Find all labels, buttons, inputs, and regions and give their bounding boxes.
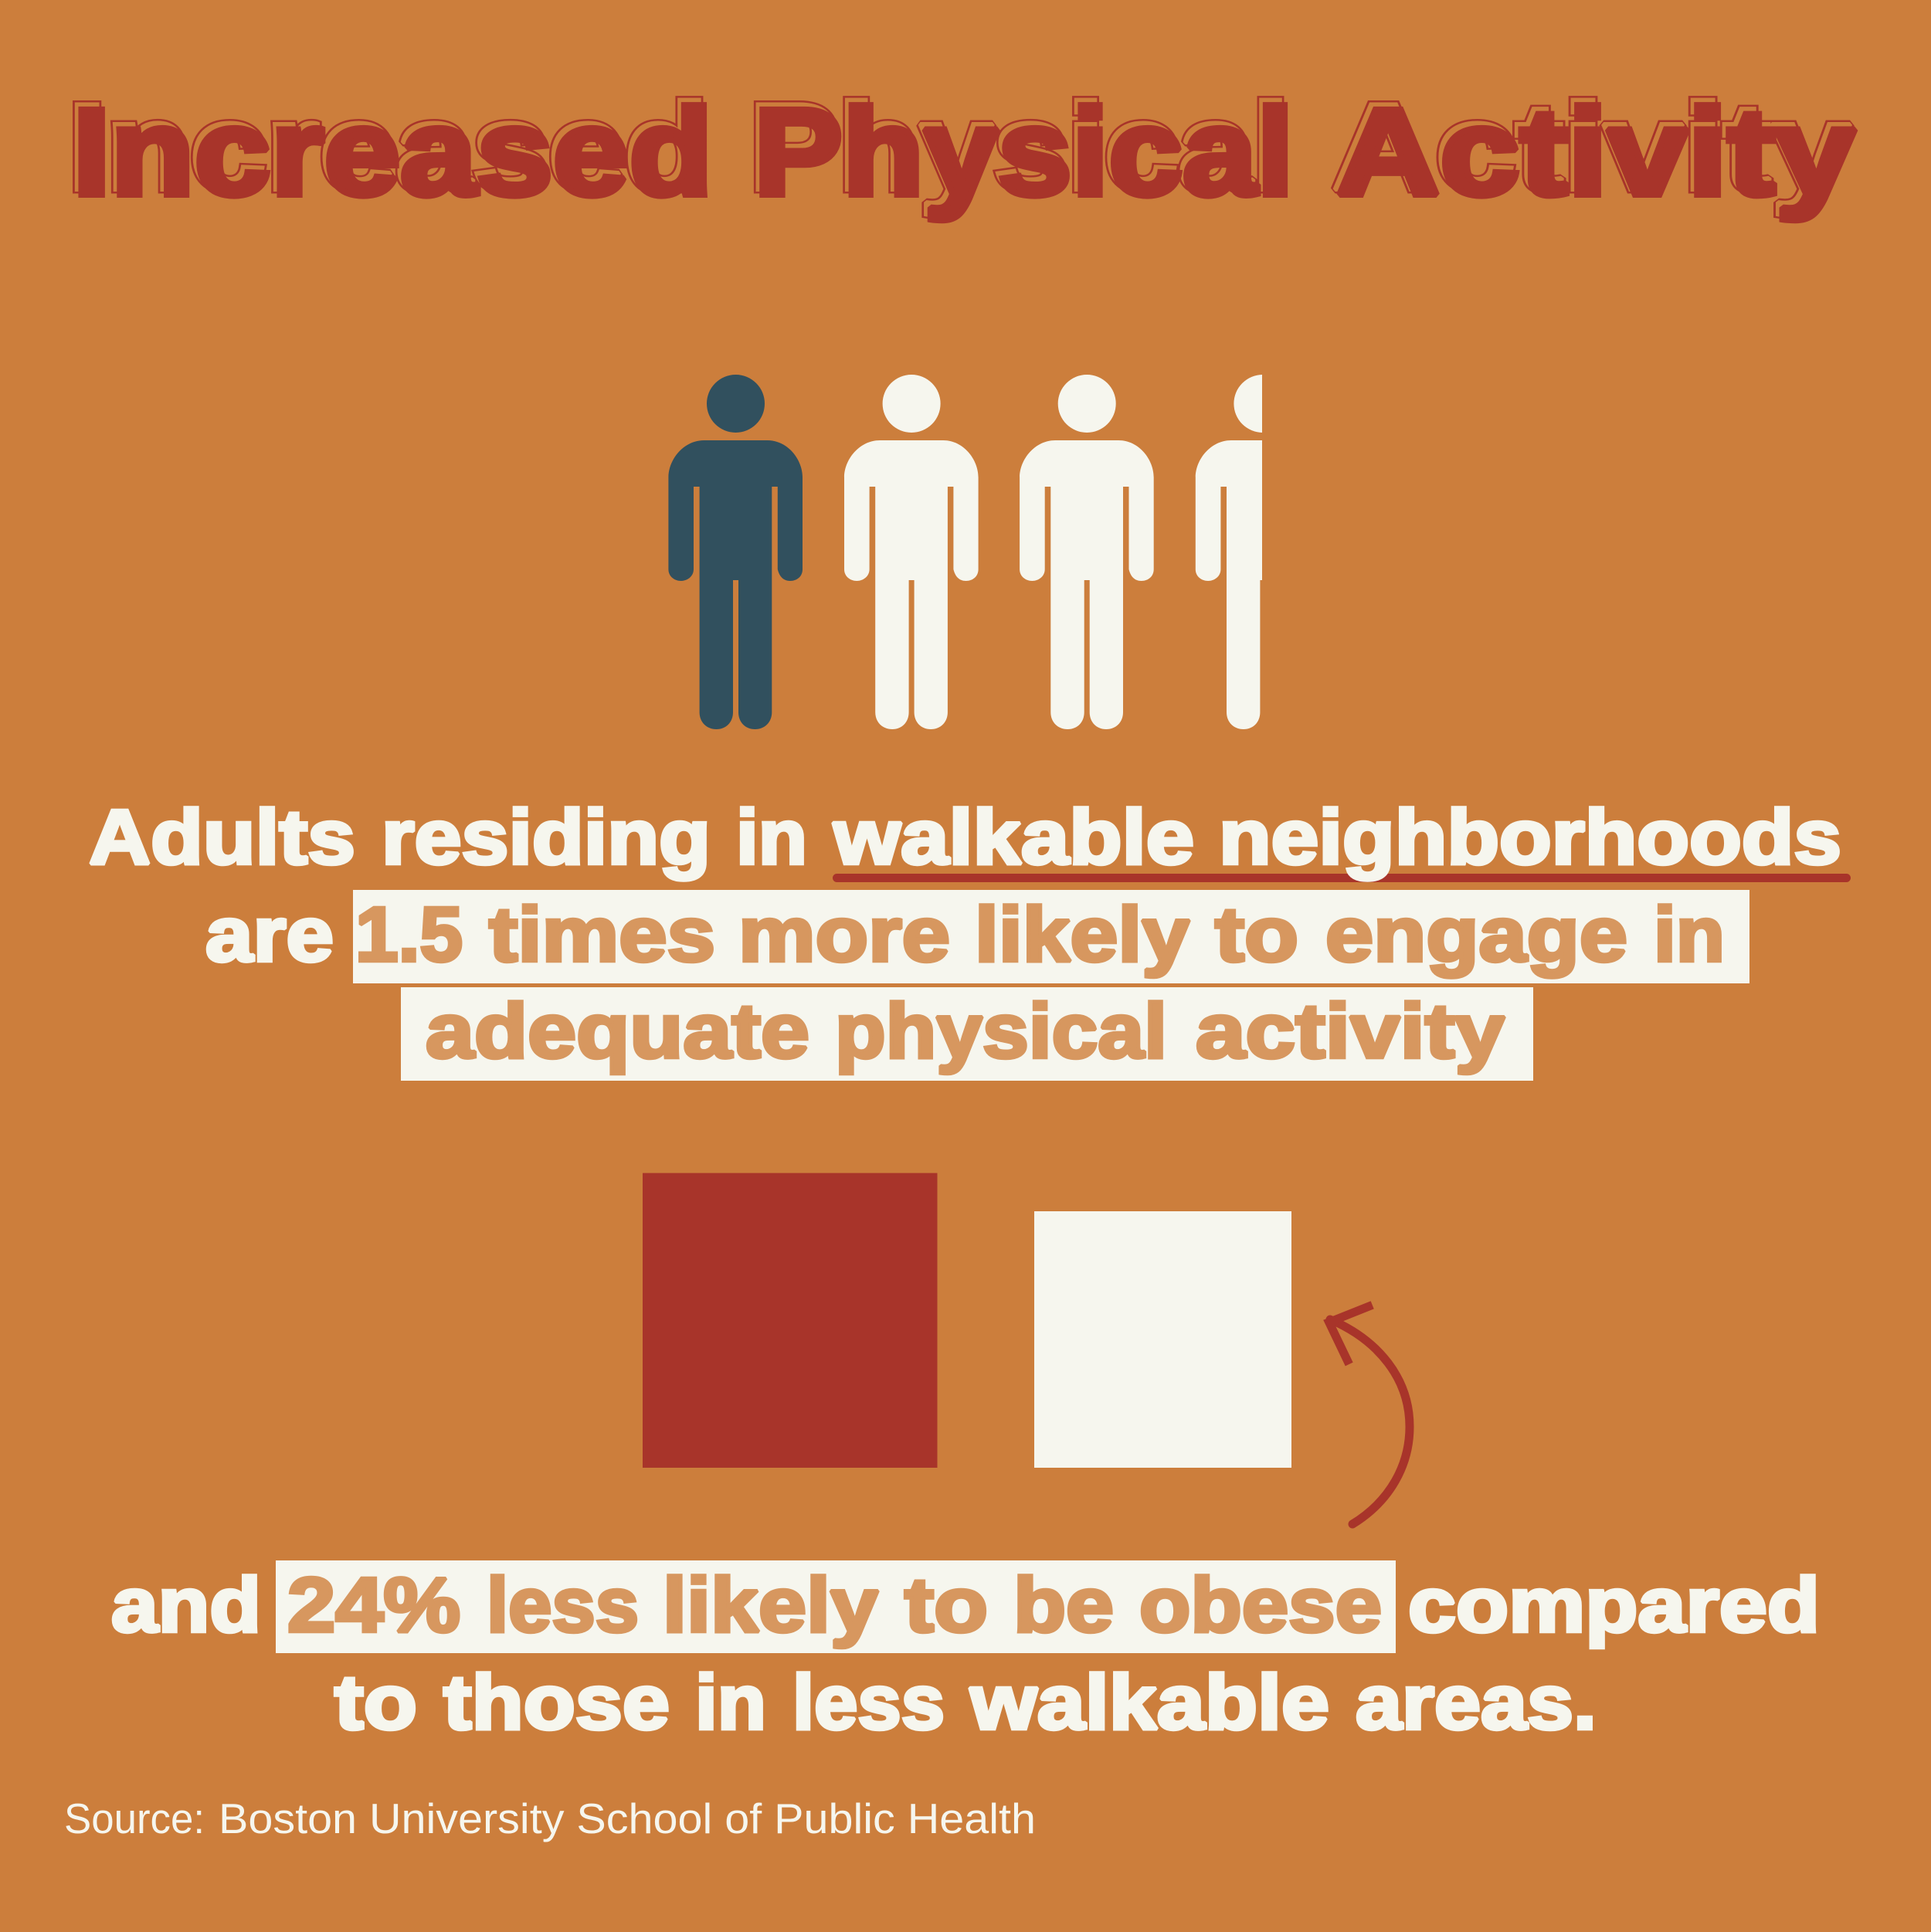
highlight: 1.5 times more likely to engage in: likely: [975, 891, 1189, 978]
highlight: 1.5 times more likely to engage in: 1.5: [355, 891, 463, 978]
text block: adults statement: [89, 794, 1841, 1081]
title: Activity: [1332, 77, 1851, 216]
highlight: adequate physical activity: adequate: [426, 988, 809, 1075]
icon: partial person: [1196, 375, 1262, 729]
highlight: 1.5 times more likely to engage in: [353, 890, 1749, 983]
title: Activity: [1332, 77, 1851, 216]
line: to those in less walkable areas: walkable: [969, 1659, 1329, 1746]
underline: walkable neighborhoods: [833, 874, 1851, 882]
highlight: 1.5 times more likely to engage in: in: [1654, 891, 1725, 978]
line: to those in less walkable areas: [334, 1659, 1597, 1746]
highlight: 24% less likely to be obese: likely: [663, 1562, 878, 1648]
title: [68, 77, 1855, 221]
line: to those in less walkable areas: to: [334, 1659, 417, 1746]
line: adults residing in walkable neighborhoods: Adults: [89, 794, 355, 881]
highlight: adequate physical activity: activity: [1196, 988, 1505, 1075]
highlight: 1.5 times more likely to engage in: times: [489, 891, 715, 978]
title: Physical: [749, 77, 1289, 216]
source line: Source:: [64, 1794, 205, 1842]
icon: person highlighted: [668, 375, 803, 729]
line: to those in less walkable areas: less: [792, 1659, 945, 1746]
line: adults residing in walkable neighborhoods: [89, 794, 1841, 881]
title: Physical: [749, 77, 1289, 216]
line: to those in less walkable areas: in: [695, 1659, 766, 1746]
icon: person: [1020, 375, 1154, 729]
title: Activity: [1336, 83, 1855, 221]
highlight: adequate physical activity: physical: [835, 988, 1167, 1075]
line: adults residing in walkable neighborhoods: walkable: [833, 794, 1194, 881]
title: Increased: [73, 83, 713, 221]
highlight: adequate physical activity: [401, 987, 1533, 1081]
highlight: 24% less likely to be obese: less: [487, 1562, 639, 1648]
highlight: 24% less likely to be obese: to: [904, 1562, 988, 1648]
icon: person: [844, 375, 979, 729]
highlight: 24% less likely to be obese: 24%: [287, 1562, 460, 1648]
line: adults residing in walkable neighborhoods: neighborhoods: [1219, 794, 1841, 881]
word: are: are: [205, 891, 334, 978]
highlight: 1.5 times more likely to engage in: more: [738, 891, 950, 978]
arrow: curved from text up to white square: [1329, 1305, 1410, 1524]
source line: Boston University School of Public Health: [219, 1794, 1036, 1842]
highlight: 24% less likely to be obese: be: [1013, 1562, 1114, 1648]
word: compared: compared: [1408, 1562, 1820, 1648]
line: adults residing in walkable neighborhoods: in: [736, 794, 807, 881]
word: and: and: [111, 1562, 261, 1648]
square: red, larger: [643, 1173, 938, 1468]
text block: obesity statement: [111, 1560, 1820, 1746]
title: Physical: [754, 83, 1294, 221]
title: Increased: [68, 77, 708, 216]
line: adults residing in walkable neighborhoods: residing: [382, 794, 711, 881]
icon row: four people, one in four highlighted: [668, 375, 1262, 729]
line: to those in less walkable areas: areas.: [1356, 1659, 1597, 1746]
highlight: 1.5 times more likely to engage in: to: [1215, 891, 1298, 978]
highlight: 24% less likely to be obese: [276, 1560, 1396, 1653]
title: Increased: [68, 77, 708, 216]
highlight: 24% less likely to be obese: obese: [1139, 1562, 1382, 1648]
square: white, 24% smaller: [1034, 1211, 1291, 1468]
highlight: 1.5 times more likely to engage in: engage: [1325, 891, 1627, 978]
line: to those in less walkable areas: those: [443, 1659, 670, 1746]
